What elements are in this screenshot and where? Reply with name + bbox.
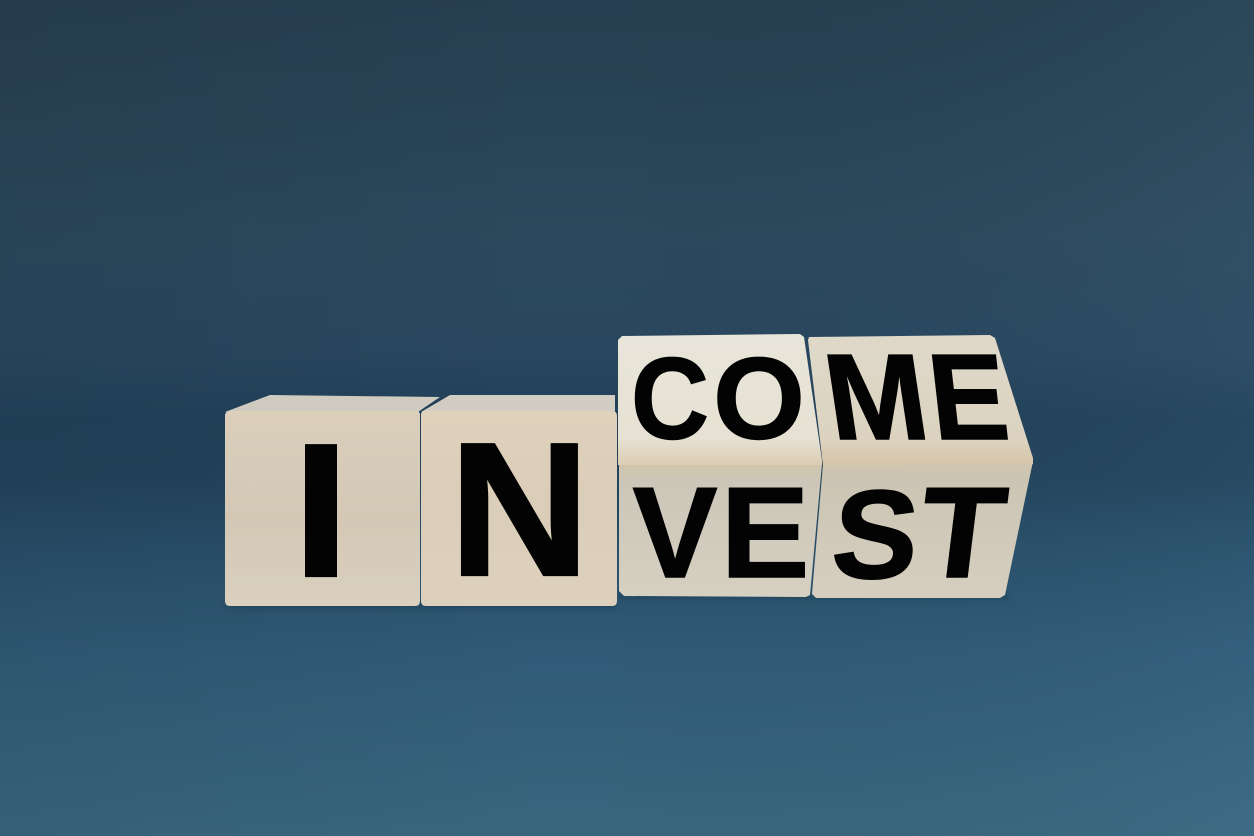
cube: lower half ST <box>812 462 1033 605</box>
letter V: V <box>633 461 717 605</box>
cube: upper half ME <box>808 329 1033 466</box>
letter E: E <box>922 330 1015 466</box>
cube: I <box>225 395 440 616</box>
letter E: E <box>721 460 809 605</box>
cube: lower half VE <box>619 460 822 605</box>
letter O: O <box>713 333 805 463</box>
letter T: T <box>911 462 1013 605</box>
letter I: I <box>293 404 349 616</box>
letter M: M <box>816 329 936 465</box>
letter N: N <box>449 403 590 615</box>
cube: N <box>421 395 617 615</box>
letter S: S <box>827 464 925 605</box>
cube shadow <box>226 594 1008 608</box>
cube: upper half CO <box>618 333 822 465</box>
letter C: C <box>631 334 709 463</box>
